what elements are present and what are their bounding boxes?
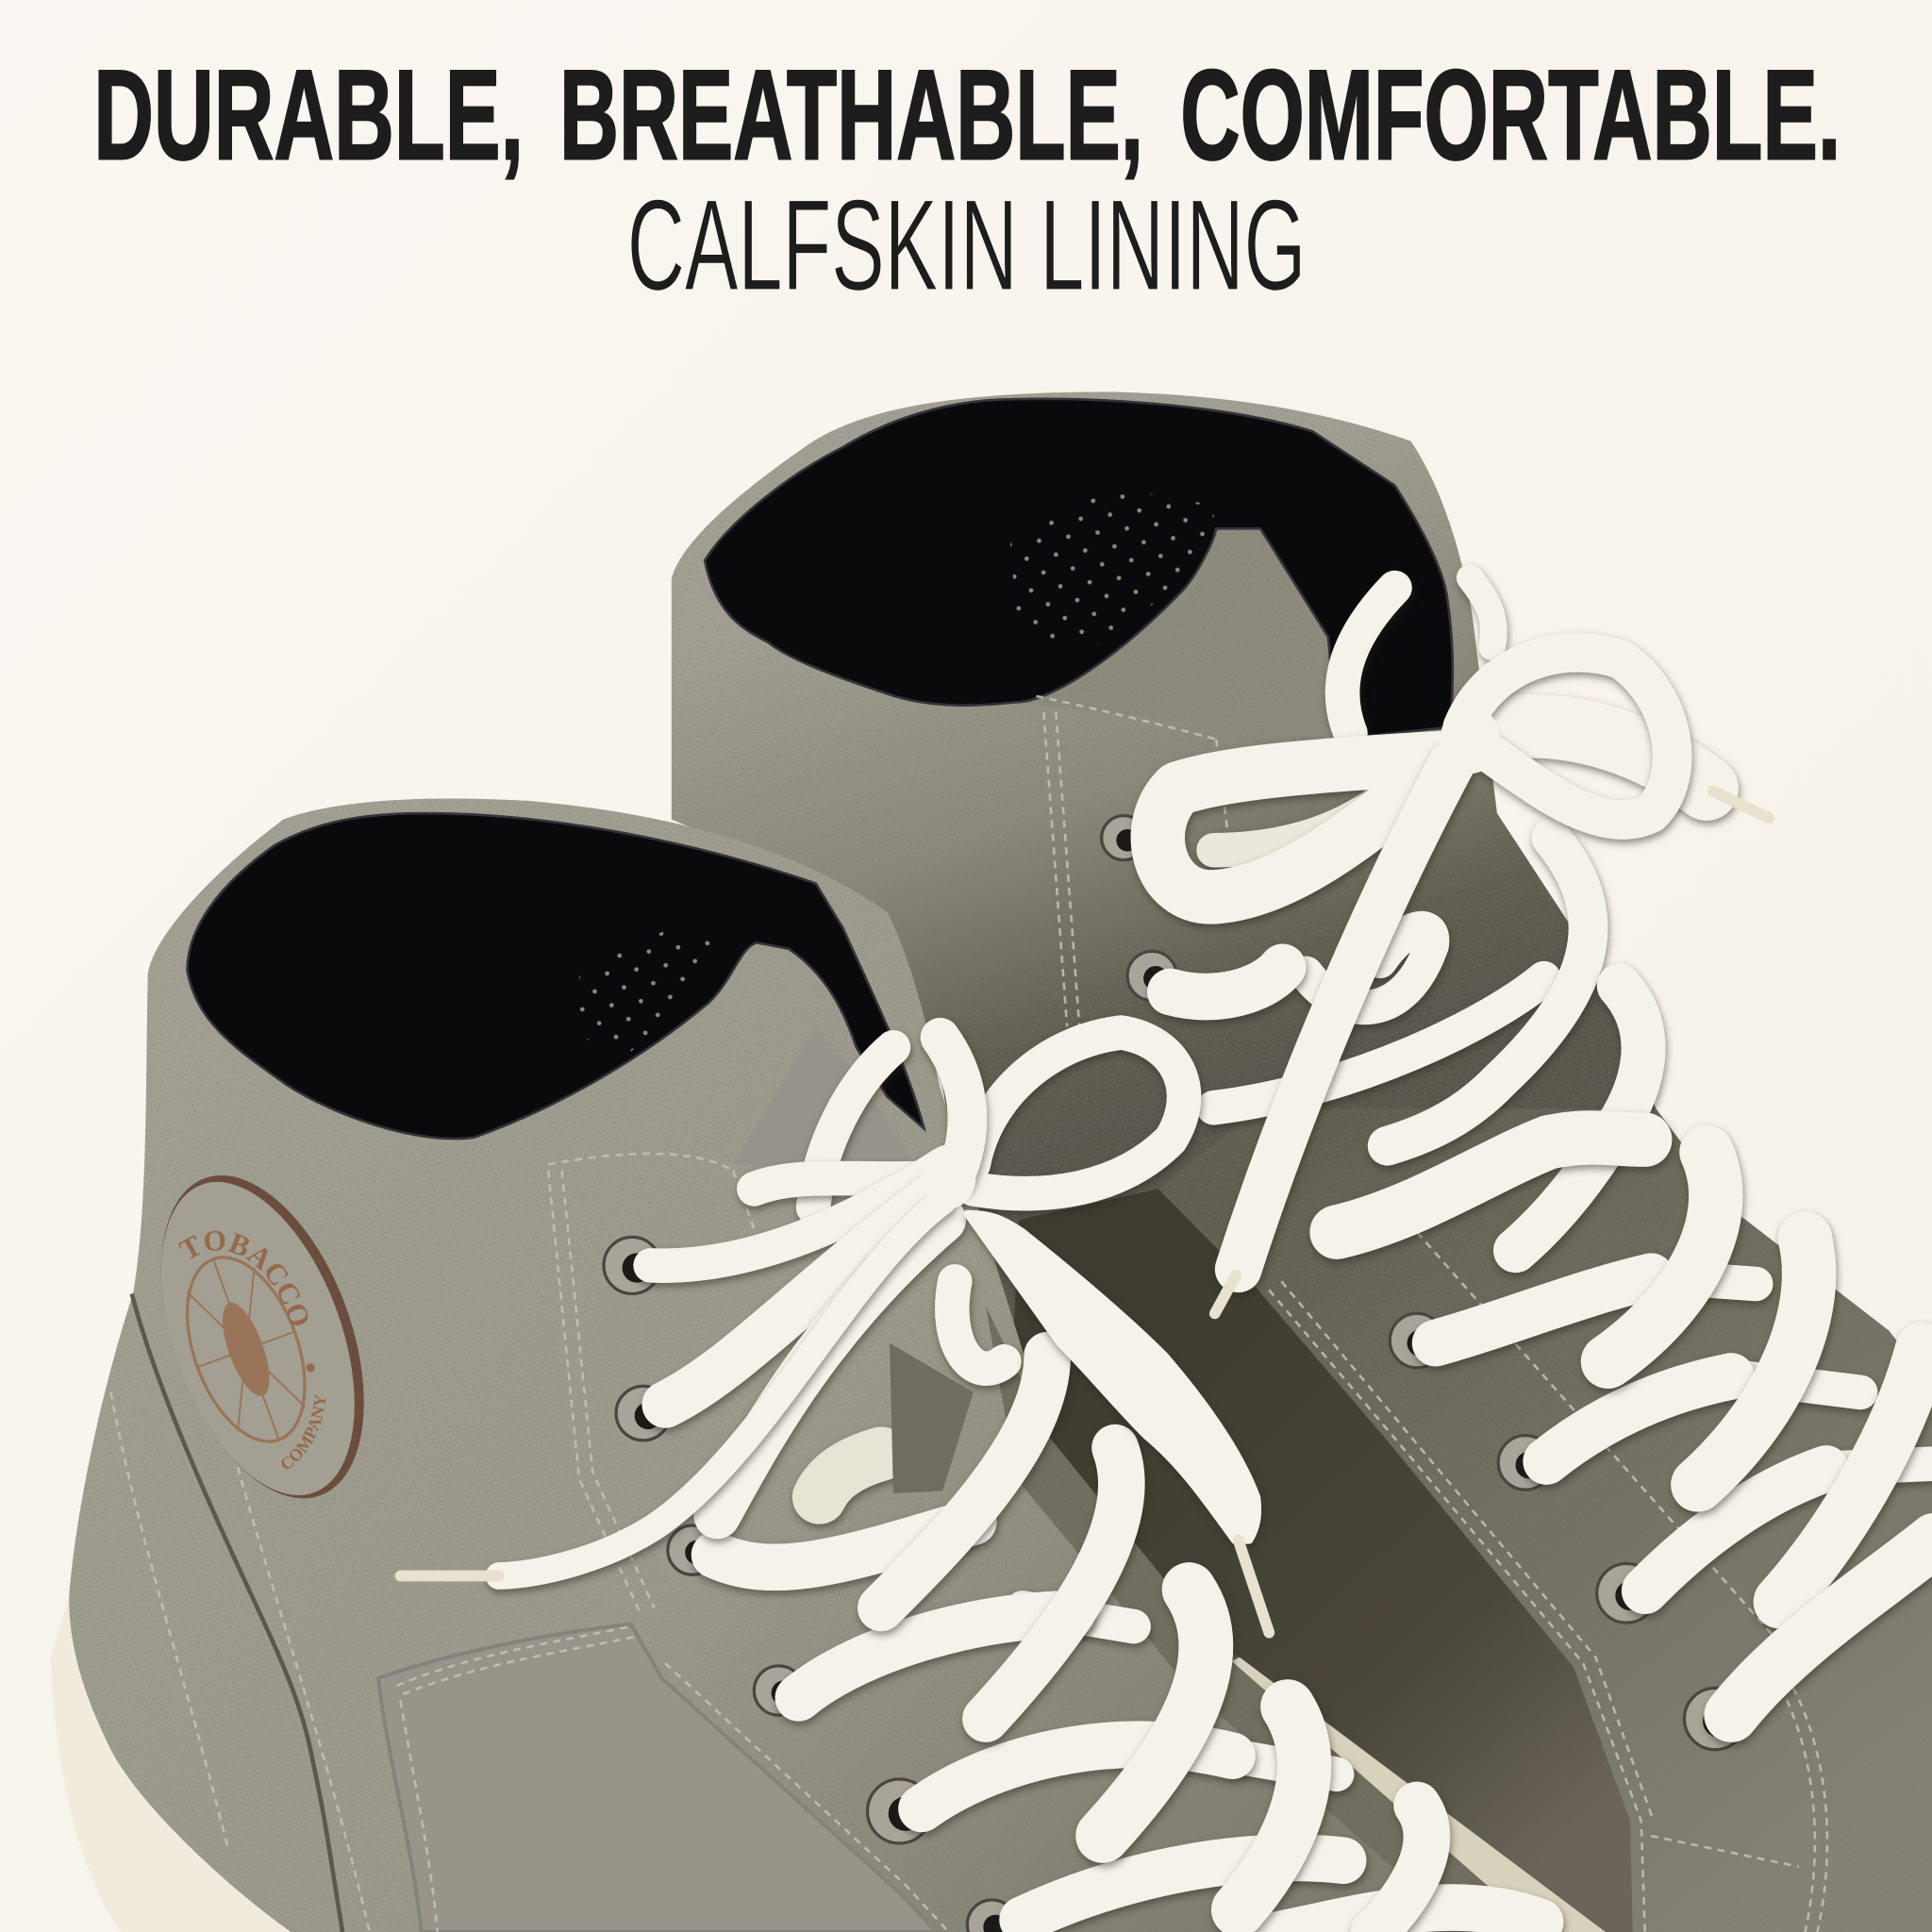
back shoe bow xyxy=(1158,653,1770,1313)
front shoe toe panel xyxy=(378,1624,937,1932)
front shoe perforations xyxy=(579,930,718,1059)
front shoe (left) xyxy=(51,798,1570,1932)
title: DURABLE, xyxy=(93,42,524,186)
back shoe right quarter xyxy=(1158,1109,1932,1932)
front shoe bow xyxy=(400,1033,1269,1633)
back shoe (right) xyxy=(672,391,1932,1932)
back shoe tongue xyxy=(1014,528,1343,740)
front shoe lining xyxy=(188,813,924,1139)
subtitle: CALFSKIN LINING xyxy=(627,174,1306,318)
back shoe sole strip xyxy=(1220,1657,1606,1932)
title xyxy=(93,42,1840,186)
badge text: COMPANY xyxy=(281,1394,326,1469)
front shoe strap xyxy=(890,1343,974,1493)
front shoe tongue nubuck xyxy=(733,1025,918,1171)
back shoe seams xyxy=(1036,696,1827,1932)
front shoe upper xyxy=(69,799,1541,1932)
badge text xyxy=(177,1230,326,1469)
badge text: TOBACCO xyxy=(177,1230,308,1325)
front shoe sole xyxy=(51,1597,308,1932)
back shoe eyelets xyxy=(1102,816,1746,1750)
front shoe eyelets xyxy=(604,1237,1017,1932)
back shoe perforations xyxy=(1010,487,1214,653)
back shoe lining xyxy=(705,399,1453,740)
back shoe laces xyxy=(1158,578,1932,1715)
front shoe seams xyxy=(111,1154,949,1932)
front shoe eyestay edge xyxy=(986,1306,1541,1932)
back shoe dark side panel xyxy=(1010,1189,1633,1932)
title: BREATHABLE, xyxy=(559,42,1143,186)
back shoe upper xyxy=(672,391,1932,1932)
front shoe laces xyxy=(400,1033,1541,1932)
leather badge xyxy=(122,1148,404,1525)
